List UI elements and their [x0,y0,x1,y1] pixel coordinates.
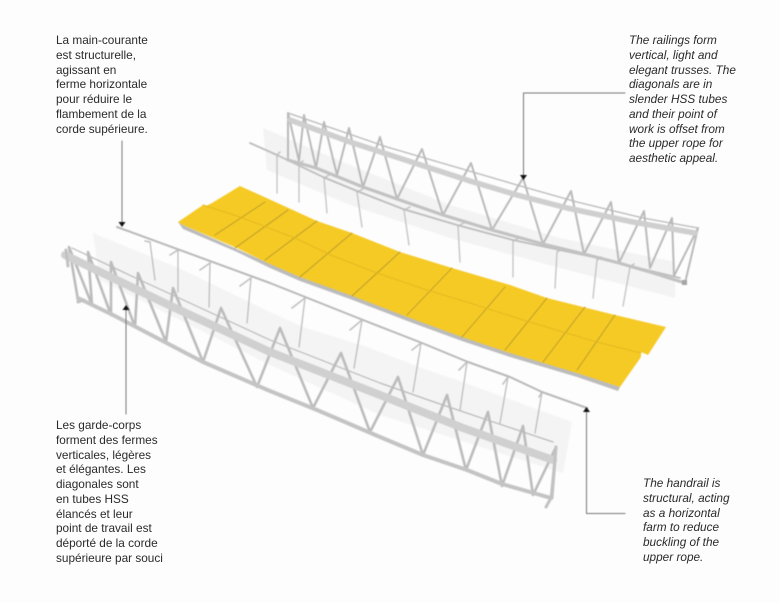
text block: railings (French): supérieure par souci [56,551,163,565]
leader arrow: railings (English) [520,93,625,180]
text block: railings (English): diagonals are in [629,77,712,91]
deck joints [215,202,615,370]
text block: handrail (French): La main-courante [56,33,148,47]
text block: railings (French): Les garde-corps [56,418,141,432]
text block: handrail (French): est structurelle, [56,48,136,62]
leader arrow: handrail (French) [118,141,126,227]
text block: handrail (French): pour réduire le [56,92,132,106]
text block: handrail (English) [643,476,730,564]
front truss [65,247,556,507]
yellow deck [178,186,666,387]
text block: railings (English): The railings form [629,33,717,47]
text block: handrail (English): as a horizontal [643,506,720,520]
text block: railings (French): forment des fermes [56,433,158,447]
deck edge [178,222,620,391]
text block: handrail (French): agissant en [56,62,116,76]
front handrail with posts [117,227,587,433]
text block: railings (English) [629,33,736,165]
back glass panel [263,128,675,298]
text block: railings (English): vertical, light and [629,48,718,62]
text block: handrail (French): flambement de la [56,107,146,121]
text block: handrail (English): structural, acting [643,491,730,505]
text block: railings (French): verticales, légères [56,448,151,462]
text block: railings (French): diagonales sont [56,477,139,491]
text block: railings (French) [56,418,163,565]
back handrail with posts [250,143,680,306]
text block: railings (English): elegant trusses. The [629,62,736,76]
text block: handrail (French): corde supérieure. [56,122,148,136]
back truss [288,113,698,285]
front glass panel [93,233,572,473]
leader arrow: railings (French) [122,305,130,414]
leader arrow: handrail (English) [583,407,625,514]
text block: handrail (English): upper rope. [643,550,703,564]
text block: railings (French): en tubes HSS [56,492,129,506]
text block: railings (French): et élégantes. Les [56,462,146,476]
text block: railings (English): slender HSS tubes [629,92,727,106]
text block: handrail (English): farm to reduce [643,520,719,534]
text block: railings (French): élancés et leur [56,506,133,520]
text block: handrail (English): The handrail is [643,476,720,490]
text block: railings (English): aesthetic appeal. [629,151,718,165]
text block: railings (English): the upper rope for [629,136,723,150]
text block: railings (French): point de travail est [56,521,152,535]
text block: handrail (English): buckling of the [643,535,719,549]
text block: railings (English): and their point of [629,107,717,121]
text block: railings (French): déporté de la corde [56,536,158,550]
text block: handrail (French): ferme horizontale [56,77,147,91]
text block: railings (English): work is offset from [629,122,725,136]
text block: handrail (French) [56,33,148,136]
